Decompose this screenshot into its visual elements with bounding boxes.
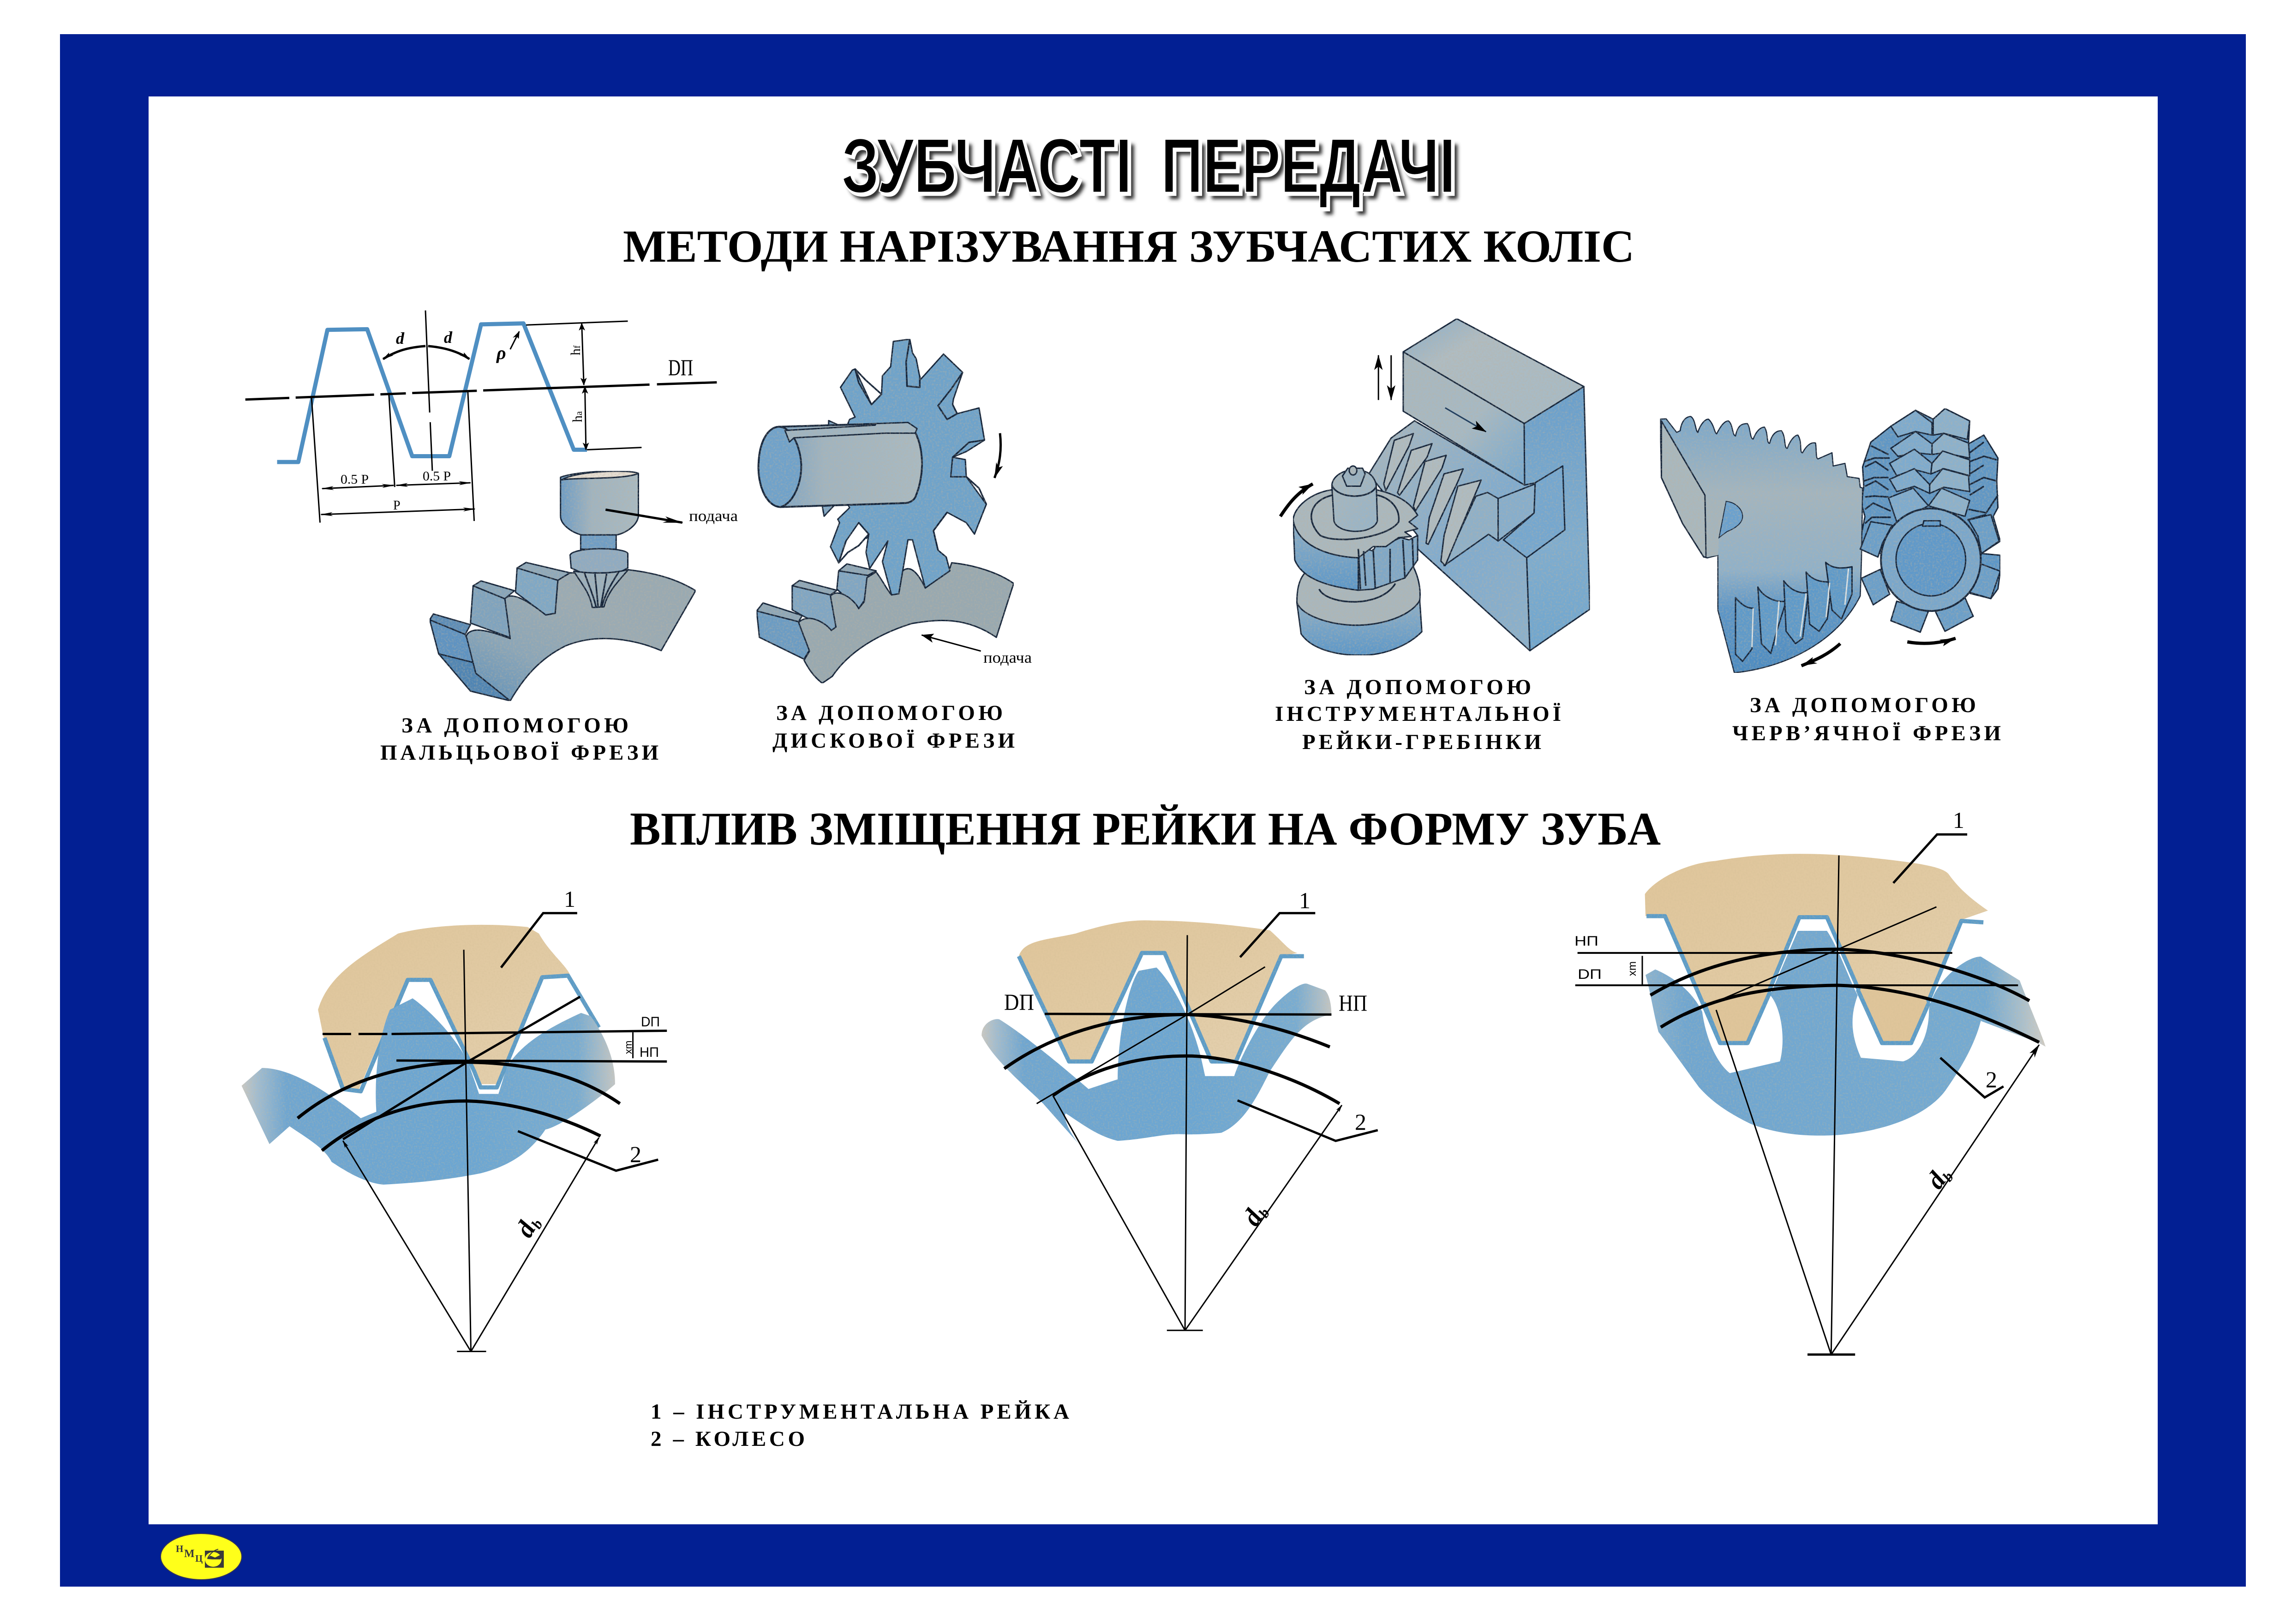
rack and wheel shapes bbox=[1645, 854, 2046, 1136]
caption: ІНСТРУМЕНТАЛЬНОЇ bbox=[1275, 702, 1561, 726]
base radii bbox=[1053, 1096, 1185, 1330]
title: ЗУБЧАСТІ bbox=[847, 128, 1137, 215]
tool rack bbox=[1645, 854, 1988, 1043]
upper disk top bbox=[1293, 490, 1418, 558]
caption: ПАЛЬЦЬОВОЇ ФРЕЗИ bbox=[380, 741, 658, 765]
tooth separators bbox=[1358, 538, 1413, 589]
tooth facets bbox=[839, 339, 986, 563]
logo: М bbox=[184, 1548, 195, 1560]
hub notch bbox=[1706, 499, 1727, 557]
rack teeth overlay bbox=[1704, 989, 1929, 1043]
white content panel bbox=[149, 96, 2158, 1524]
pale tooth highlights bbox=[1752, 569, 1849, 647]
caption: ЗА ДОПОМОГОЮ bbox=[1750, 693, 1976, 717]
cutter collar bbox=[570, 549, 628, 573]
lower sector teeth bbox=[1735, 563, 1852, 661]
base radii bbox=[1716, 1010, 1831, 1354]
tooth top faces bbox=[430, 563, 570, 635]
labels: d bbox=[1921, 1167, 1951, 1194]
legend bbox=[651, 1400, 1069, 1451]
hob end teeth bbox=[1860, 515, 2000, 632]
profile labels: DП bbox=[668, 354, 693, 380]
labels: 2 bbox=[1986, 1067, 1997, 1092]
profile labels: ha bbox=[570, 411, 585, 422]
profile labels: hf bbox=[568, 345, 583, 355]
profile labels: d bbox=[396, 329, 405, 348]
leader 1 bbox=[1240, 913, 1315, 957]
wheel bbox=[242, 998, 615, 1185]
logo: Н bbox=[176, 1543, 183, 1554]
hob bore bbox=[1896, 523, 1966, 596]
labels: 1 bbox=[564, 886, 575, 912]
profile labels: ρ bbox=[496, 342, 506, 363]
caption bbox=[1275, 675, 1561, 754]
small teeth behind shaft bbox=[822, 420, 839, 516]
labels: НП bbox=[640, 1045, 659, 1060]
upper disk wall bbox=[1293, 520, 1358, 590]
tooth side faces bbox=[430, 568, 558, 701]
bolt bbox=[1349, 466, 1357, 475]
construction lines bbox=[1642, 856, 1936, 1354]
gear front face bbox=[466, 569, 695, 701]
caption: ЗА ДОПОМОГОЮ bbox=[1304, 675, 1531, 699]
rack and wheel shapes bbox=[981, 920, 1331, 1146]
block top face bbox=[1403, 319, 1584, 424]
hub key bbox=[1719, 501, 1742, 538]
panel: rack profile diagram bbox=[245, 311, 717, 522]
shaft top edge bbox=[1332, 485, 1376, 496]
heading: cutting methods: МЕТОДИ НАРІЗУВАННЯ ЗУБЧАСТИХ КОЛІС bbox=[623, 221, 1634, 272]
labels: xm bbox=[622, 1041, 634, 1054]
wheel bbox=[981, 968, 1331, 1146]
panel: rack cutter bbox=[1275, 319, 1590, 754]
key notch bbox=[1922, 521, 1940, 526]
leader 2 bbox=[518, 1131, 658, 1171]
leader 2 bbox=[1940, 1058, 2004, 1097]
leader 2 bbox=[1238, 1100, 1378, 1141]
panel: positive displacement diagram bbox=[242, 886, 667, 1351]
tooth side faces bbox=[757, 571, 868, 659]
central tooth rows right bbox=[1928, 408, 1969, 516]
title: ЗУБЧАСТІ bbox=[842, 122, 1132, 209]
profile labels: 0.5 P bbox=[423, 469, 451, 484]
sector bevel bbox=[1661, 421, 1706, 557]
labels: НП bbox=[1339, 990, 1367, 1016]
gear teeth bbox=[1358, 535, 1418, 590]
caption bbox=[772, 701, 1015, 753]
leader 1 bbox=[1893, 834, 1967, 883]
profile labels: 0.5 P bbox=[341, 473, 369, 487]
profile labels: d bbox=[444, 328, 453, 347]
central tooth rows left bbox=[1889, 410, 1932, 521]
notch faces bbox=[1498, 484, 1535, 541]
rack teeth bbox=[1384, 433, 1481, 566]
labels: xm bbox=[1626, 961, 1639, 976]
labels: b bbox=[1939, 1169, 1957, 1185]
labels bbox=[1004, 887, 1367, 1231]
panel: finger milling cutter bbox=[380, 471, 738, 765]
pitch arcs bbox=[1651, 949, 2029, 1001]
cutter neck bbox=[580, 535, 616, 549]
cutter head bbox=[561, 471, 638, 535]
feed label: подача bbox=[983, 649, 1032, 666]
keyway bbox=[785, 422, 917, 442]
labels: DП bbox=[1004, 989, 1034, 1015]
labels: НП bbox=[1574, 934, 1598, 949]
panel: disc milling cutter bbox=[757, 339, 1032, 753]
title: ПЕРЕДАЧІ bbox=[1161, 122, 1455, 209]
shaft end face bbox=[759, 427, 802, 507]
hob right lower teeth bbox=[1969, 553, 2000, 599]
fluted cutting end bbox=[574, 569, 628, 607]
flute lines bbox=[584, 572, 619, 607]
caption bbox=[380, 713, 658, 765]
labels: b bbox=[528, 1217, 546, 1231]
feed arrow bbox=[605, 509, 682, 522]
leader 1 bbox=[501, 913, 577, 968]
cutter top face bbox=[562, 471, 638, 480]
rack base bbox=[1369, 421, 1565, 651]
shaft bbox=[759, 423, 922, 507]
profile labels: P bbox=[393, 498, 401, 513]
tool rack bbox=[1019, 920, 1298, 1061]
rack profile outline bbox=[1646, 916, 1983, 1043]
lower disk wall bbox=[1297, 600, 1422, 655]
legend: 1 – ІНСТРУМЕНТАЛЬНА РЕЙКА bbox=[651, 1400, 1069, 1424]
overlay outline bbox=[1704, 990, 1929, 1043]
panel: hob cutter bbox=[1660, 408, 2001, 745]
rack and wheel shapes bbox=[242, 925, 615, 1185]
feed label: подача bbox=[689, 508, 738, 525]
pitch line, dimension lines bbox=[245, 311, 717, 522]
base radii bbox=[343, 1141, 471, 1351]
sector gear bbox=[1660, 417, 1862, 673]
hob end face bbox=[1881, 509, 1981, 611]
panel: negative displacement diagram bbox=[1574, 807, 2046, 1354]
title: ПЕРЕДАЧІ bbox=[1163, 125, 1458, 211]
heading: rack displacement: ВПЛИВ ЗМІЩЕННЯ РЕЙКИ НА ФОРМУ ЗУБА bbox=[630, 803, 1661, 855]
caption: ЗА ДОПОМОГОЮ bbox=[401, 713, 628, 737]
disc cutter bbox=[830, 339, 986, 595]
block front face bbox=[1403, 352, 1525, 485]
labels: 1 bbox=[1299, 887, 1311, 913]
gear front face bbox=[799, 563, 1014, 683]
construction lines bbox=[1037, 935, 1265, 1330]
labels bbox=[1574, 807, 1997, 1195]
pitch arcs bbox=[1004, 1014, 1330, 1069]
motion arrows bbox=[1281, 355, 1486, 516]
title bbox=[842, 122, 1461, 215]
hob base silhouette bbox=[1859, 408, 2000, 553]
caption: ЧЕРВ’ЯЧНОЇ ФРЕЗИ bbox=[1732, 721, 2001, 745]
cutter motion arrows bbox=[922, 433, 1001, 651]
title: ЗУБЧАСТІ bbox=[844, 125, 1134, 211]
profile labels bbox=[341, 328, 693, 513]
panel: zero displacement diagram bbox=[981, 887, 1378, 1330]
recessed tooth bbox=[951, 457, 966, 477]
pitch arcs bbox=[298, 1062, 620, 1118]
caption: РЕЙКИ-ГРЕБІНКИ bbox=[1302, 730, 1541, 754]
pinion shaft bbox=[1332, 470, 1377, 531]
legend: 2 – КОЛЕСО bbox=[651, 1427, 805, 1451]
tool rack bbox=[318, 925, 570, 1092]
caption: ЗА ДОПОМОГОЮ bbox=[776, 701, 1003, 725]
tooth top faces bbox=[757, 564, 876, 622]
labels: 2 bbox=[630, 1141, 641, 1167]
labels: d bbox=[1237, 1205, 1268, 1231]
wheel bbox=[1646, 931, 2046, 1136]
labels: DП bbox=[641, 1014, 660, 1030]
logo bbox=[161, 1534, 242, 1580]
lower disk arc bbox=[1319, 583, 1395, 602]
title: ПЕРЕДАЧІ bbox=[1167, 128, 1461, 215]
labels: d bbox=[510, 1217, 541, 1242]
caption bbox=[1732, 693, 2001, 745]
labels: 2 bbox=[1355, 1109, 1366, 1135]
nut bbox=[1342, 468, 1365, 486]
labels bbox=[510, 886, 660, 1242]
logo: Ц bbox=[195, 1553, 203, 1564]
caption: ДИСКОВОЇ ФРЕЗИ bbox=[772, 729, 1015, 753]
blue tooth profile bbox=[277, 324, 587, 462]
column chevrons bbox=[1864, 442, 1998, 527]
block side face bbox=[1524, 387, 1590, 651]
rack profile outline bbox=[1019, 953, 1304, 1061]
construction lines bbox=[464, 950, 633, 1351]
labels: 1 bbox=[1953, 807, 1964, 833]
labels: DП bbox=[1578, 967, 1602, 982]
inner ring bbox=[1311, 495, 1399, 539]
lower disk top bbox=[1297, 567, 1420, 625]
labels: b bbox=[1255, 1205, 1273, 1221]
rotation arrows bbox=[1801, 638, 1956, 666]
rack profile outline bbox=[324, 976, 599, 1091]
